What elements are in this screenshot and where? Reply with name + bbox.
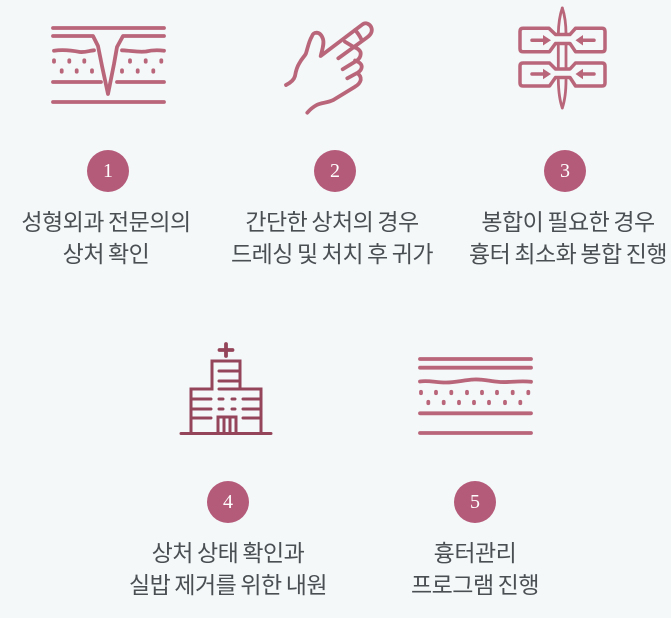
icon: injured finger [284,21,374,115]
text: step 2: 간단한 상처의 경우 [245,203,419,237]
text: step 5 [411,534,539,600]
text: step 2 [231,203,433,269]
text: step 1: 성형외과 전문의의 [21,203,191,237]
text: step 4: 실밥 제거를 위한 내원 [129,566,327,600]
number badge 3: 3 [560,160,570,182]
icon: scar-free skin layers [418,357,533,435]
text: step 3 [469,203,667,269]
icon: skin incision [51,26,166,104]
text: step 3: 봉합이 필요한 경우 [481,203,655,237]
icon: hospital [180,342,272,435]
text: step 5: 흉터관리 [434,534,516,568]
text: step 3: 흉터 최소화 봉합 진행 [469,235,667,269]
text: step 4 [129,534,327,600]
number badge 5 [454,481,496,523]
number badge 2 [314,150,356,192]
text: step 4: 상처 상태 확인과 [152,534,304,568]
text: step 1 [21,203,191,269]
text: step 2: 드레싱 및 처치 후 귀가 [231,235,433,269]
number badge 5: 5 [470,491,480,513]
number badge 4 [207,481,249,523]
text: step 5: 프로그램 진행 [411,566,539,600]
icon: suture closure [518,6,607,110]
text: step 1: 상처 확인 [63,235,149,269]
number badge 1: 1 [103,160,113,182]
number badge 4: 4 [223,491,233,513]
number badge 3 [544,150,586,192]
number badge 1 [87,150,129,192]
number badge 2: 2 [330,160,340,182]
